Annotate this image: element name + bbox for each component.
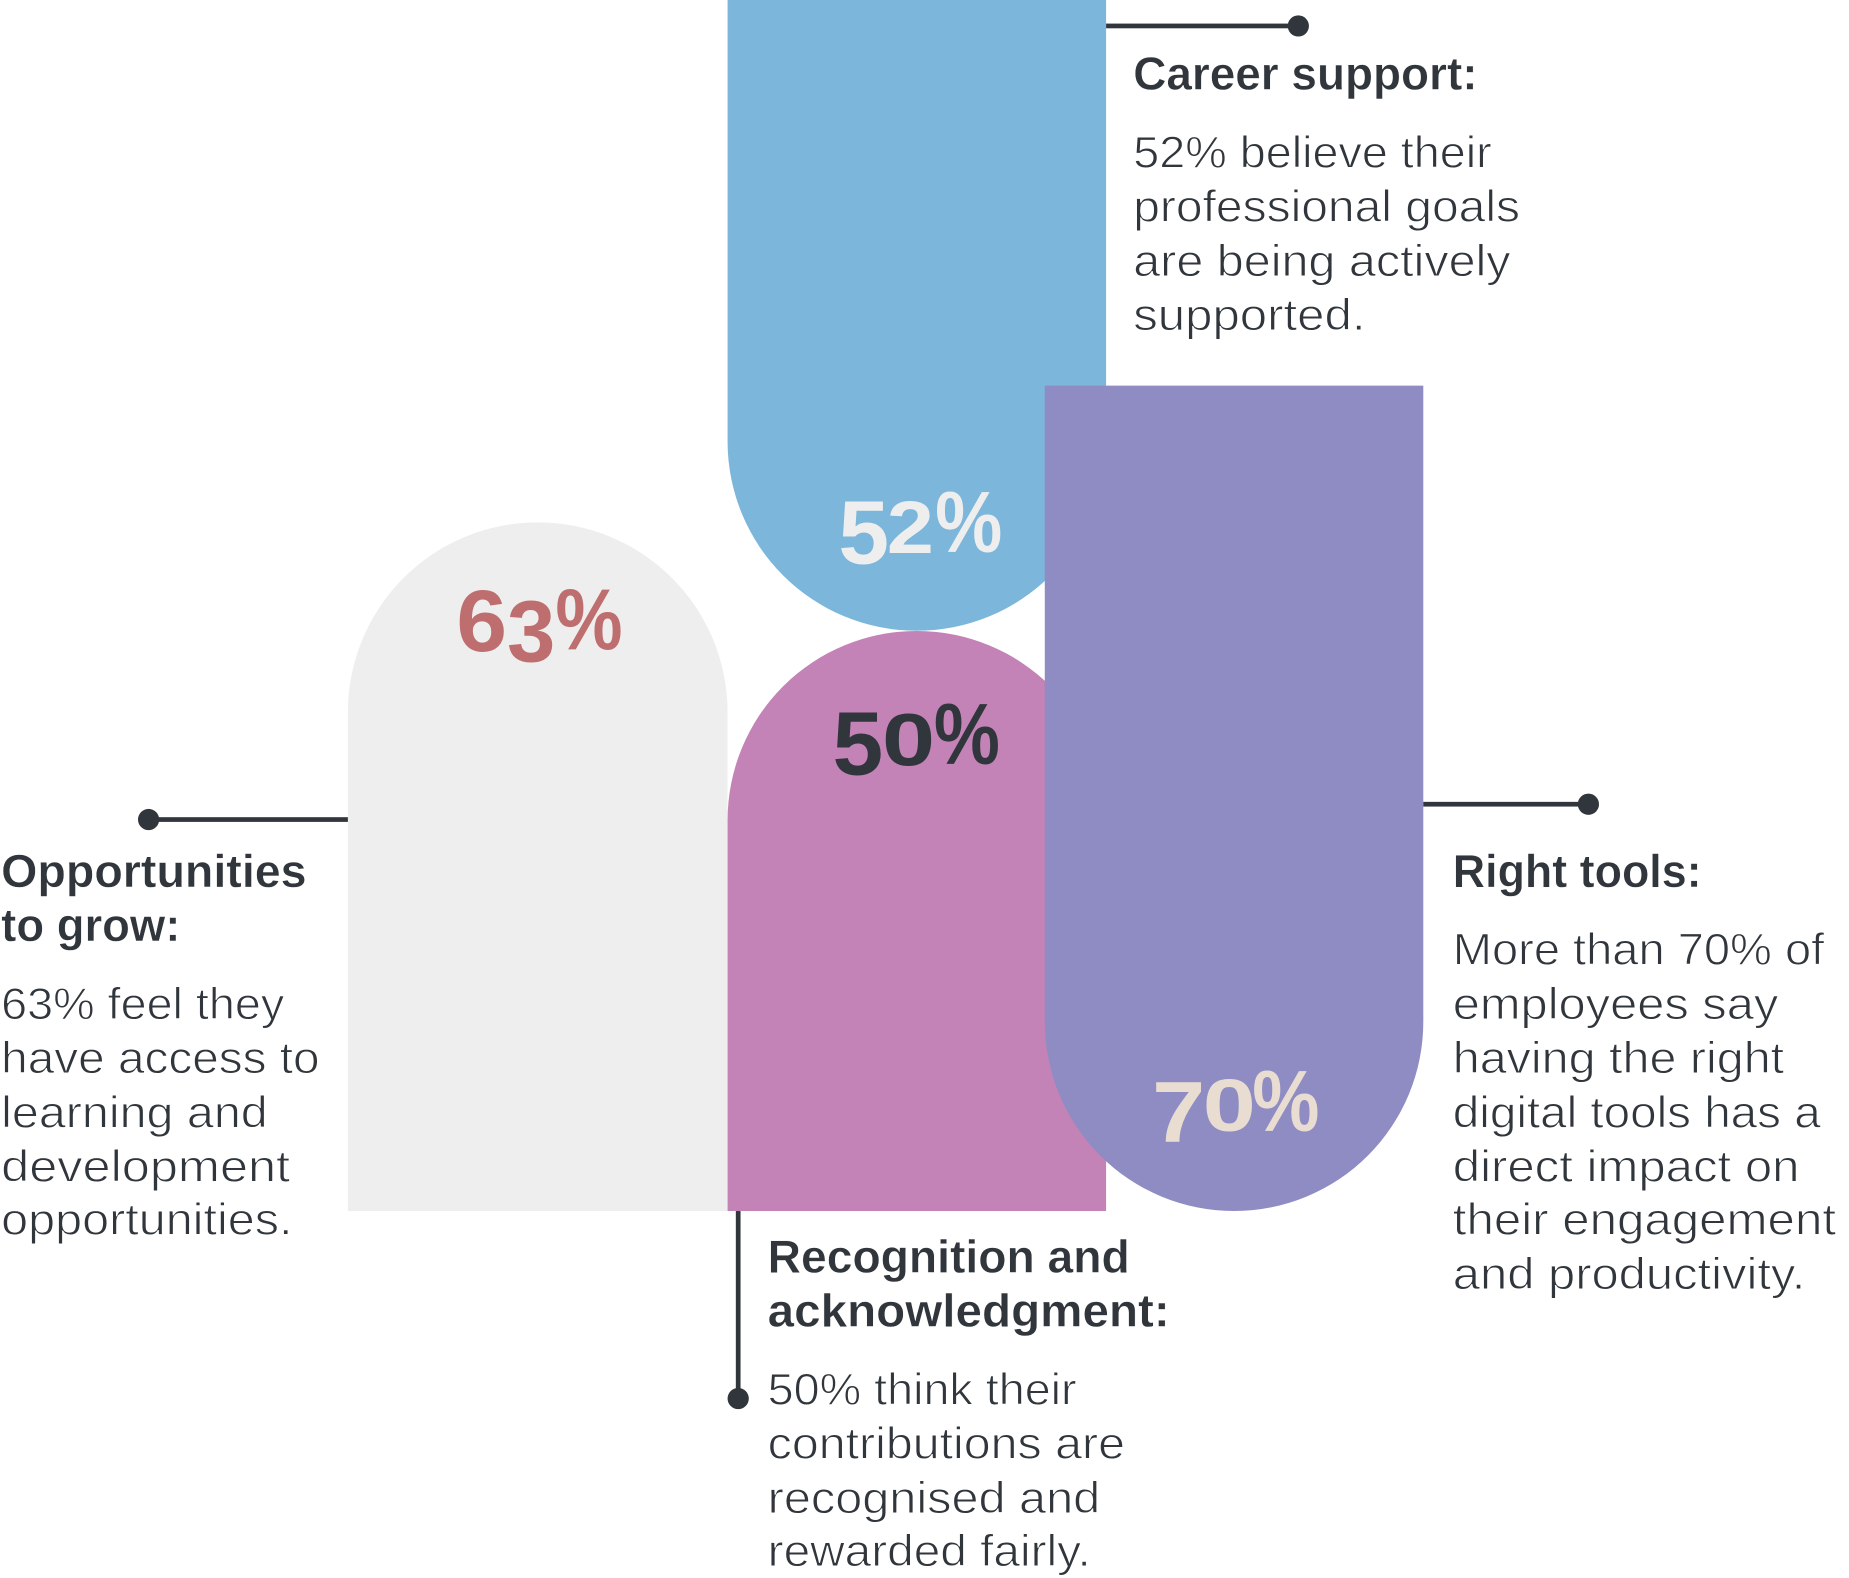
text: opportunities to grow [1,979,320,1245]
text: right tools: having the right [1453,1033,1785,1083]
text: career support: supported. [1133,290,1366,340]
value: 50%: 0 [882,698,935,781]
text: recognition and acknowledgment: recognised and [768,1473,1100,1523]
panel: purple column, right tools [1045,386,1423,1211]
heading: recognition and acknowledgment: acknowledgment: [768,1285,1170,1337]
heading: opportunities to grow: Opportunities [1,845,307,897]
value: 63%: 3 [507,584,555,681]
connector: career support [1106,15,1309,37]
value: 52%: % [935,475,1002,571]
heading: right tools: Right tools: [1453,845,1702,897]
panel: pink arch, recognition [728,631,1106,1211]
text: career support: are being actively [1133,236,1511,286]
text: recognition and acknowledgment: contributions are [768,1419,1125,1469]
text: right tools [1453,925,1837,1299]
text: opportunities to grow: opportunities. [1,1195,292,1245]
value: 70%: % [1252,1054,1320,1150]
heading: career support: Career support: [1133,48,1478,100]
panel: blue column, career support [728,0,1106,631]
connector: right tools [1423,794,1599,815]
heading: recognition and acknowledgment: Recognition and [768,1230,1130,1282]
value: 52%: 2 [887,486,934,569]
text: career support [1133,127,1520,340]
connector: opportunities to grow [138,809,348,830]
text: right tools: their engagement [1453,1195,1837,1245]
value: 50%: % [934,687,1000,783]
value: 63%: % [555,573,623,669]
value: 63%: 6 [456,573,507,670]
heading: recognition and acknowledgment [768,1230,1170,1337]
text: career support: professional goals [1133,182,1520,232]
heading: opportunities to grow [1,845,307,951]
text: right tools: More than 70% of [1453,925,1825,975]
text: right tools: and productivity. [1453,1249,1805,1299]
text: right tools: digital tools has a [1453,1087,1821,1137]
value: 70%: 0 [1203,1064,1256,1147]
text: right tools: employees say [1453,979,1779,1029]
connector: recognition [728,1211,749,1409]
text: career support: 52% believe their [1133,127,1492,177]
text: opportunities to grow: development [1,1142,291,1192]
text: recognition and acknowledgment: 50% think their [768,1364,1077,1414]
text: opportunities to grow: 63% feel they [1,979,285,1029]
value: 70%: 7 [1152,1064,1205,1160]
heading: opportunities to grow: to grow: [1,899,180,951]
value: 52%: 5 [838,483,889,583]
text: opportunities to grow: have access to [1,1033,320,1083]
text: right tools: direct impact on [1453,1142,1799,1192]
text: recognition and acknowledgment: rewarded fairly. [768,1526,1091,1576]
value: 50%: 5 [833,694,883,794]
text: recognition and acknowledgment [768,1364,1125,1576]
text: opportunities to grow: learning and [1,1087,268,1137]
panel: grey arch, opportunities to grow [348,522,728,1211]
